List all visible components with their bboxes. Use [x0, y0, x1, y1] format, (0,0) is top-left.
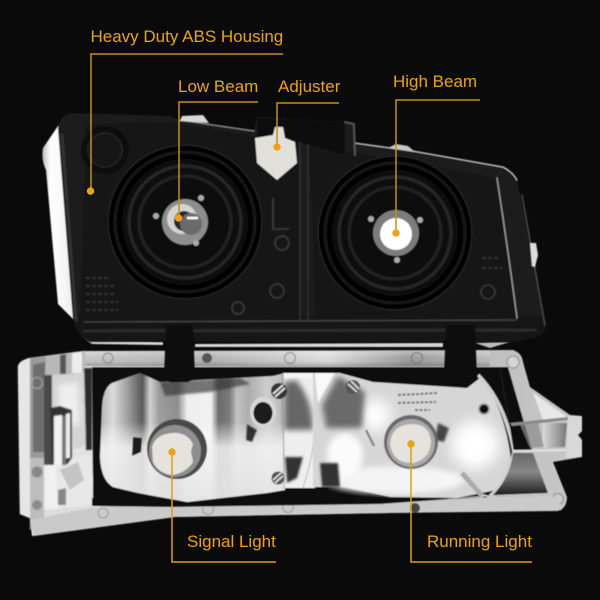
upper headlight housing	[42, 113, 546, 342]
left grey lobe	[322, 376, 365, 428]
right reflector	[313, 373, 512, 498]
right beam ring seal	[317, 155, 473, 311]
callout: Running Light	[407, 440, 532, 562]
vent hole with screws	[250, 380, 360, 484]
housing body	[58, 113, 546, 342]
dark cavity	[92, 367, 514, 508]
left reflector	[100, 373, 285, 502]
dark spot right of socket	[435, 423, 449, 442]
top mounting tab left	[180, 115, 209, 123]
callout: Running Light: Running Light	[427, 532, 532, 551]
black clips joining units	[164, 325, 477, 384]
housing edge highlights	[62, 120, 545, 331]
callout: Signal Light: Signal Light	[187, 532, 276, 551]
bottom rim	[30, 497, 562, 536]
callout: Heavy Duty ABS Housing: Heavy Duty ABS Housing	[90, 27, 283, 46]
left beam ring seal	[107, 144, 263, 300]
running light socket	[384, 415, 438, 469]
dark gap above rim	[92, 494, 493, 507]
callout: Low Beam: Low Beam	[178, 77, 258, 96]
small posts and L mark	[232, 198, 495, 314]
white wedge	[315, 373, 335, 403]
side tab	[530, 243, 538, 267]
chrome rim around right reflector	[478, 375, 514, 496]
dark crease near vent	[246, 424, 257, 442]
chrome slivers between units	[84, 338, 510, 348]
left end block	[18, 351, 95, 530]
signal light socket	[147, 419, 207, 479]
top mounting tab right	[388, 144, 415, 152]
white lens edge	[42, 126, 74, 320]
callout: Heavy Duty ABS Housing	[87, 27, 283, 195]
right end bracket	[493, 356, 582, 504]
lower dark patch	[320, 463, 340, 487]
callout: Low Beam	[175, 77, 258, 222]
adjuster knob	[255, 127, 297, 180]
lower chrome signal light unit	[18, 350, 582, 536]
centre divider between reflectors	[283, 373, 316, 488]
callout: Adjuster: Adjuster	[278, 77, 341, 96]
reflector shine blobs	[359, 399, 391, 431]
callout: Adjuster	[273, 77, 341, 151]
inner panel right	[310, 146, 517, 320]
callout: High Beam	[392, 72, 480, 237]
posts	[462, 404, 490, 506]
molded marks	[398, 393, 438, 410]
callout: High Beam: High Beam	[393, 72, 477, 91]
top chrome bar	[85, 351, 490, 366]
rim details	[98, 502, 420, 518]
breather knob	[81, 126, 129, 174]
inner panel left	[80, 122, 298, 322]
small dark notch	[132, 437, 142, 456]
adjuster bay dark top	[257, 118, 345, 155]
callout: Signal Light	[168, 448, 276, 562]
reflector top shadow	[160, 378, 250, 396]
molded text marks	[86, 258, 502, 310]
chrome outer frame	[18, 350, 582, 536]
